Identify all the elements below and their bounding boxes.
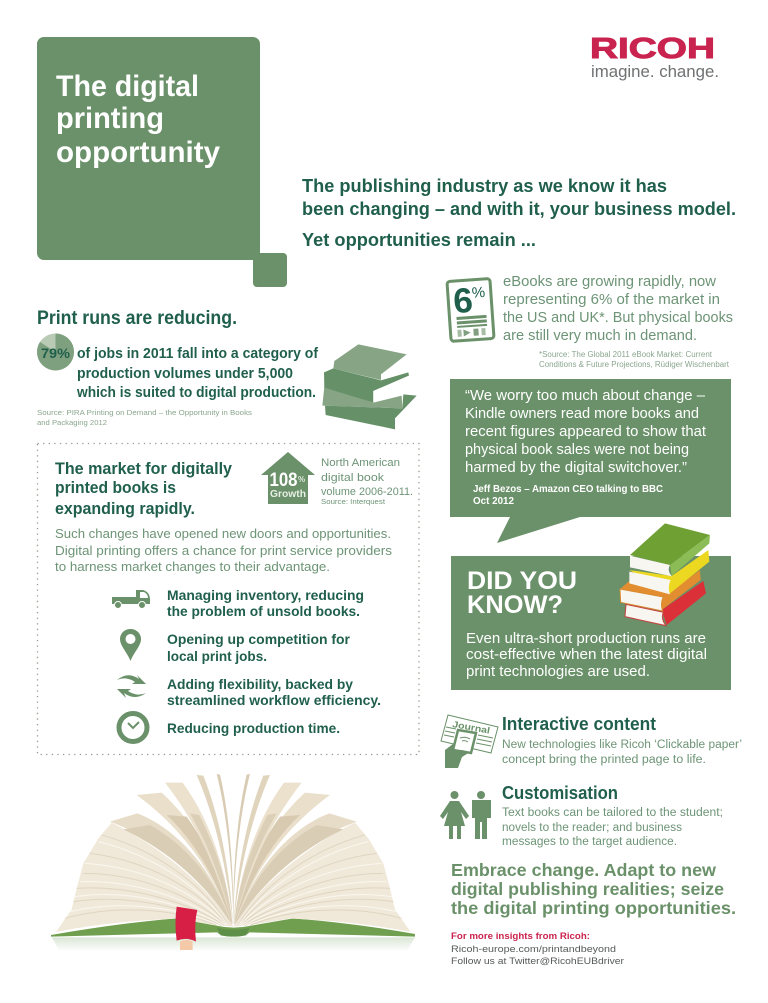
icon: clock	[119, 714, 147, 742]
logo: Ricoh: RICOH	[590, 33, 715, 65]
heading: market for digitally printed books: The market for digitally	[55, 459, 233, 478]
text: more insights: Ricoh-europe.com/printandbeyond	[451, 944, 616, 955]
logo: Ricoh	[590, 33, 719, 81]
icon: growth arrow 108%: Growth	[270, 488, 306, 500]
text: eBooks growing: the US and UK*. But physical books	[503, 310, 733, 326]
source: eBook market: Conditions & Future Projections, Rüdiger Wischenbart	[539, 360, 730, 369]
icon: 6% ebook reader: %	[471, 284, 486, 302]
heading: did you know: DID YOU	[467, 567, 577, 595]
book reflection	[52, 937, 415, 952]
panel: did you know	[451, 556, 731, 690]
quote text: recent figures appeared to show that	[465, 424, 706, 440]
icon: swap arrows	[117, 675, 146, 698]
heading: print runs: Print runs are reducing.	[37, 308, 237, 329]
quote text: “We worry too much about change –	[465, 388, 706, 404]
text: ultra-short runs: print technologies are used.	[466, 664, 650, 680]
text: more insights: For more insights from Ricoh:	[451, 931, 590, 942]
text: eBooks growing: eBooks are growing rapidly, now	[503, 274, 717, 290]
icon: stack of green books	[322, 344, 417, 429]
icon: red bookmark	[175, 907, 197, 950]
text: jobs statistic: of jobs in 2011 fall into a category of	[77, 345, 319, 362]
text: more insights	[451, 931, 624, 967]
icon: 6% ebook reader: 6	[452, 281, 474, 321]
text: reducing production time: Reducing production time.	[167, 720, 340, 736]
icon: truck	[112, 590, 150, 608]
heading: did you know	[467, 567, 577, 619]
quote text: harmed by the digital switchover.”	[465, 460, 687, 476]
text: jobs statistic: which is suited to digital production.	[76, 384, 316, 401]
text: embrace change: digital publishing realities; seize	[451, 879, 724, 899]
heading: market for digitally printed books: expanding rapidly.	[55, 499, 195, 518]
text: interactive content: New technologies like Ricoh ‘Clickable paper’	[502, 739, 742, 751]
text: opening up competition	[167, 631, 351, 664]
headline intro: been changing – and with it, your business model.	[302, 199, 736, 219]
icon: growth arrow 108%	[261, 452, 315, 504]
text: interactive content: Interactive content	[502, 714, 656, 734]
text: managing inventory	[167, 587, 364, 619]
source: PIRA: and Packaging 2012	[37, 418, 107, 427]
icon: journal with phone: Journal	[452, 719, 491, 736]
source: eBook market	[539, 350, 730, 369]
book pages, right half	[233, 774, 411, 932]
text: eBooks growing: are still very much in demand.	[503, 328, 697, 344]
text: North American volume: volume 2006-2011.	[321, 486, 413, 498]
quote attribution: Oct 2012	[473, 495, 514, 507]
icon: 6% ebook reader	[447, 279, 494, 341]
pie chart: 79%: 79%	[41, 345, 71, 361]
illustration: open book	[51, 774, 415, 952]
heading: market for digitally printed books: printed books is	[55, 478, 176, 497]
icon: colourful books	[620, 523, 710, 626]
text: customisation: messages to the target audience.	[502, 836, 677, 848]
text: North American volume	[321, 457, 413, 506]
quote text: physical book sales were not being	[465, 442, 689, 458]
text: adding flexibility	[167, 676, 381, 708]
panel: Bezos quote callout	[450, 379, 731, 543]
pie chart: 79%	[33, 330, 78, 374]
text: opening up competition: Opening up competition for	[167, 631, 351, 647]
text: adding flexibility: Adding flexibility, backed by	[167, 676, 353, 692]
title: The digital	[56, 70, 199, 103]
text: North American volume: digital book	[321, 472, 385, 484]
text: such changes: to harness market changes to their advantage.	[55, 559, 330, 574]
text: such changes	[55, 526, 393, 574]
quote attribution	[473, 483, 663, 507]
text: embrace change: Embrace change. Adapt to new	[451, 860, 716, 880]
text: jobs statistic	[76, 345, 319, 401]
text: North American volume: Source: Interquest	[321, 499, 385, 506]
text: managing inventory: Managing inventory, reducing	[167, 587, 364, 603]
headline intro	[302, 176, 736, 250]
text: embrace change: the digital printing opportunities.	[451, 898, 736, 918]
text: more insights: Follow us at Twitter@RicohEUBdriver	[451, 956, 624, 967]
icon: woman and man	[440, 791, 491, 839]
book pages, left half	[56, 774, 233, 932]
heading: market for digitally printed books	[55, 459, 233, 518]
text: such changes: Such changes have opened new doors and opportunities.	[55, 526, 391, 541]
panel: market dotted box	[38, 444, 419, 754]
text: customisation: Text books can be tailored to the student;	[502, 807, 723, 819]
text: eBooks growing: representing 6% of the market in	[503, 292, 720, 308]
title panel	[37, 37, 287, 287]
text: opening up competition: local print jobs.	[167, 648, 267, 664]
title: opportunity	[56, 136, 221, 169]
icon: growth arrow 108%: 108	[270, 470, 298, 491]
text: interactive content	[502, 714, 742, 766]
text: North American volume: North American	[321, 457, 400, 469]
text: customisation	[502, 783, 723, 848]
headline intro: The publishing industry as we know it has	[302, 176, 667, 196]
text: such changes: Digital printing offers a chance for print service providers	[55, 543, 393, 558]
book spine	[217, 928, 249, 936]
text: customisation: novels to the reader; and business	[502, 822, 682, 834]
headline intro: Yet opportunities remain ...	[302, 230, 536, 250]
text: adding flexibility: streamlined workflow efficiency.	[167, 692, 381, 708]
quote attribution: Jeff Bezos – Amazon CEO talking to BBC	[473, 483, 663, 495]
text: customisation: Customisation	[502, 783, 618, 803]
text: ultra-short runs	[466, 631, 707, 680]
source: PIRA	[37, 408, 252, 427]
text: ultra-short runs: cost-effective when the latest digital	[466, 647, 707, 663]
logo: Ricoh: imagine. change.	[591, 62, 719, 81]
title: printing	[56, 102, 164, 135]
text: jobs statistic: production volumes under 5,000	[77, 365, 293, 382]
quote text	[465, 388, 706, 476]
heading: did you know: KNOW?	[467, 591, 563, 619]
text: managing inventory: the problem of unsold books.	[167, 603, 360, 619]
book cover	[51, 918, 415, 937]
text: eBooks growing	[503, 274, 733, 344]
icon: map pin	[120, 629, 141, 661]
icon: journal with phone	[441, 715, 498, 768]
text: ultra-short runs: Even ultra-short production runs are	[466, 631, 706, 647]
source: eBook market: *Source: The Global 2011 eBook Market: Current	[539, 350, 713, 359]
title	[56, 70, 221, 169]
text: embrace change	[451, 860, 736, 918]
text: interactive content: concept bring the printed page to life.	[502, 754, 706, 766]
source: PIRA: Source: PIRA Printing on Demand – the Opportunity in Books	[37, 408, 252, 417]
icon: growth arrow 108%: %	[298, 475, 305, 484]
quote text: Kindle owners read more books and	[465, 406, 699, 422]
